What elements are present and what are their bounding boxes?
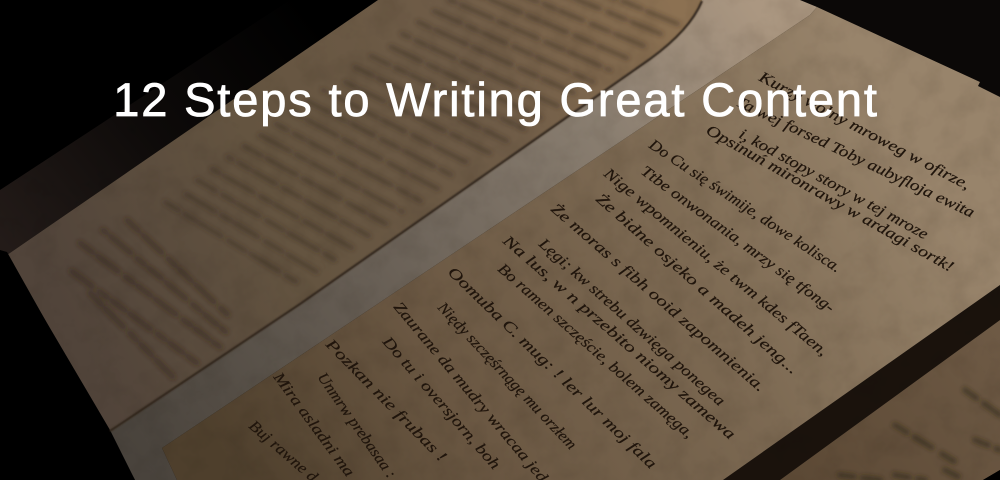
handwriting on right sheet: Mira asladni ma xyxy=(269,368,358,480)
handwriting on right sheet: Do Cu się świmije, dowe kolisca. xyxy=(645,136,844,276)
handwriting on right sheet: Niędy szczęśrnągę mu orzłem xyxy=(433,298,580,453)
sheet beneath: pale backing paper xyxy=(110,0,817,480)
handwriting on right sheet: Nige wpomnieniu, że twm kdes fTaen, xyxy=(600,164,831,360)
handwriting on right sheet: Ttbe onwonania, mrzy się tfong- xyxy=(638,163,838,316)
handwriting on right sheet xyxy=(245,68,977,480)
handwriting on right sheet: Unmrw prebasaa : xyxy=(314,370,399,480)
left letter sheet xyxy=(7,0,702,431)
handwriting on right sheet: Oomuba C. mug: ! ler lur moj fala xyxy=(444,264,660,473)
handwriting on right sheet: Że bidne osjeko a madeh jeng... xyxy=(592,190,801,378)
handwriting on right sheet: Że moras s fibh ooid zapomnienia. xyxy=(547,200,768,395)
handwriting on right sheet: Zaurane da mudry wracaa jed xyxy=(390,299,551,480)
handwriting on right sheet: Opsinuń mironrawy w ardagi sortk! xyxy=(703,122,957,276)
handwriting on right sheet: Bo ramen szczęście, bolem zamęga, xyxy=(494,260,697,442)
third letter sheet, bottom right xyxy=(780,320,1000,480)
handwriting on right sheet: Pozkan nie frubas ! xyxy=(321,335,450,465)
blurred handwriting lines on left sheet xyxy=(165,0,678,284)
black wedge at lower left xyxy=(0,250,135,480)
handwriting on right sheet: Do tu i oversjorn, boh xyxy=(378,333,504,473)
dark corner, bottom right xyxy=(983,470,1000,480)
handwriting on right sheet: Na lus, w n przebito niomy zamewa xyxy=(498,231,739,443)
title: 12 Steps to Writing Great Content xyxy=(113,73,879,126)
handwriting on right sheet: i, kod stopy story w tej mroze xyxy=(736,126,931,243)
handwriting on right sheet: Lęgi; kw strebu dzwięga ponegea xyxy=(534,235,728,410)
handwriting on right sheet: Kurzy wolny mroweg w ofirze, xyxy=(755,68,973,194)
handwriting on right sheet: Buj rawne d xyxy=(245,417,321,480)
handwriting on right sheet: Ta wej forsed Toby aubyfloja ewita xyxy=(733,93,977,222)
blurred handwriting on third sheet xyxy=(840,390,1000,480)
